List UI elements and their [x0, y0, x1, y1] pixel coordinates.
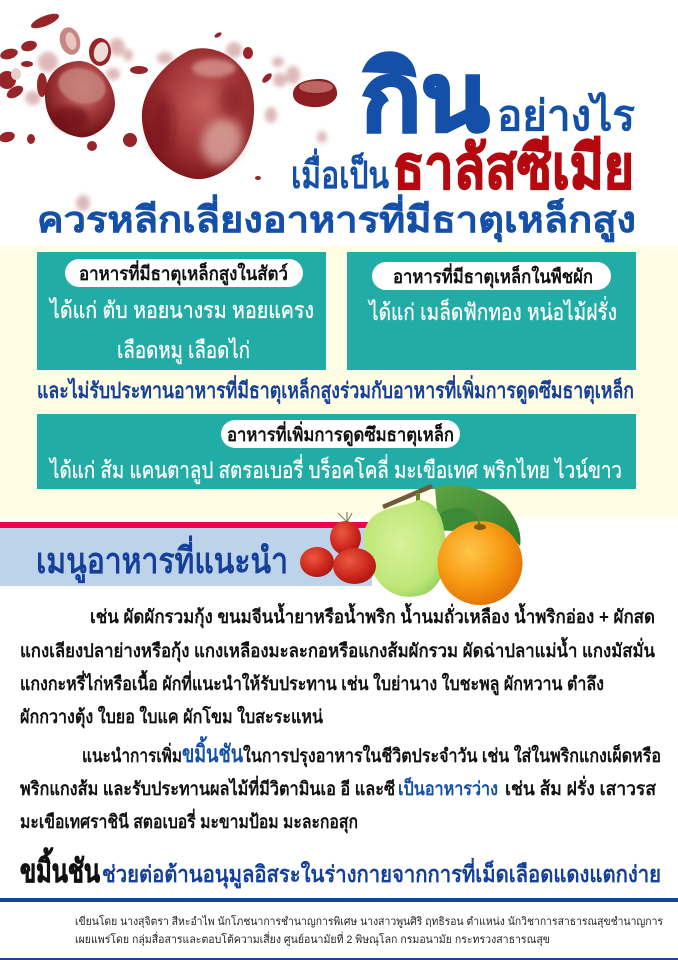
panel: iron foods in plants — [347, 252, 636, 370]
text block: turmeric advice — [20, 735, 661, 834]
illustration: large blood cell — [142, 48, 254, 179]
pill heading: absorption foods — [221, 420, 460, 448]
pill heading: absorption foods: อาหารที่เพิ่มการดูดซึมธาตุเหล็ก — [227, 421, 454, 447]
title: กิน: กิน — [361, 45, 489, 150]
icon: tomatoes — [300, 512, 376, 584]
text: plant food list: ได้แก่ เมล็ดฟักทอง หน่อไม้ฝรั่ง — [367, 296, 617, 325]
text: animal food list: เลือดหมู เลือดไก่ — [117, 337, 250, 364]
text block: turmeric advice: ขมิ้นชัน — [182, 735, 243, 768]
text block: menu examples: ผักกวางตุ้ง ใบยอ ใบแค ผักโขม ใบสะระแหน่ — [20, 705, 323, 729]
banner: recommended menu — [0, 522, 372, 586]
text block: credits: เผยแพร่โดย กลุ่มสื่อสารและตอบโต้ความเสี่ยง ศูนย์อนามัยที่ 2 พิษณุโลก กรมอนามัย กระทรวงสาธารณสุข — [75, 931, 550, 946]
illustration: medium blood cell — [45, 61, 115, 137]
illustration: small blood cell — [293, 79, 337, 107]
text block: turmeric advice: แนะนำการเพิ่ม — [82, 742, 182, 766]
pill heading: animal foods: อาหารที่มีธาตุเหล็กสูงในสัตว์ — [79, 260, 288, 286]
text block: turmeric advice: พริกแกงส้ม และรับประทานผลไม้ที่มีวิตามินเอ อี และซี — [20, 775, 395, 799]
heading: recommended menu: เมนูอาหารที่แนะนำ — [36, 535, 288, 584]
title: ธาลัสซีเมีย: ธาลัสซีเมีย — [393, 134, 634, 201]
icon: guava leaves — [430, 485, 520, 546]
panel: iron-rich animal foods — [37, 252, 326, 370]
title: เมื่อเป็น: เมื่อเป็น — [291, 148, 389, 197]
pill heading: animal foods — [65, 259, 303, 287]
panel: foods that increase iron absorption — [37, 414, 636, 489]
callout: turmeric benefit: ขมิ้นชัน — [20, 847, 100, 889]
text: animal food list: ได้แก่ ตับ หอยนางรม หอยแครง — [48, 297, 314, 323]
icon: guava — [364, 486, 446, 597]
text block: turmeric advice: เป็นอาหารว่าง — [398, 776, 498, 799]
text block: credits — [75, 914, 663, 946]
text block: turmeric advice: มะเขือเทศราชินี สตอเบอรี่ มะขามป้อม มะละกอสุก — [20, 808, 358, 834]
text block: turmeric advice: เช่น ส้ม ฝรั่ง เสาวรส — [505, 775, 657, 799]
text block: menu examples: แกงกะหรี่ไก่หรือเนื้อ ผักที่แนะนำให้รับประทาน เช่น ใบย่านาง ใบชะพลู ผักหวาน ตำลึง — [20, 670, 604, 696]
text: animal food list — [48, 297, 314, 364]
callout: turmeric benefit — [20, 847, 661, 889]
icon: orange — [438, 505, 522, 605]
subtitle: ควรหลีกเลี่ยงอาหารที่มีธาตุเหล็กสูง — [37, 194, 636, 243]
title: อย่างไร: อย่างไร — [497, 91, 635, 139]
background: cream section — [0, 245, 678, 517]
illustration: fruit group — [300, 485, 522, 605]
text block: menu examples — [20, 603, 655, 729]
illustration: red blood cells — [0, 11, 337, 211]
pill heading: plant foods: อาหารที่มีธาตุเหล็กในพืชผัก — [393, 263, 593, 289]
pill heading: plant foods — [372, 262, 611, 290]
